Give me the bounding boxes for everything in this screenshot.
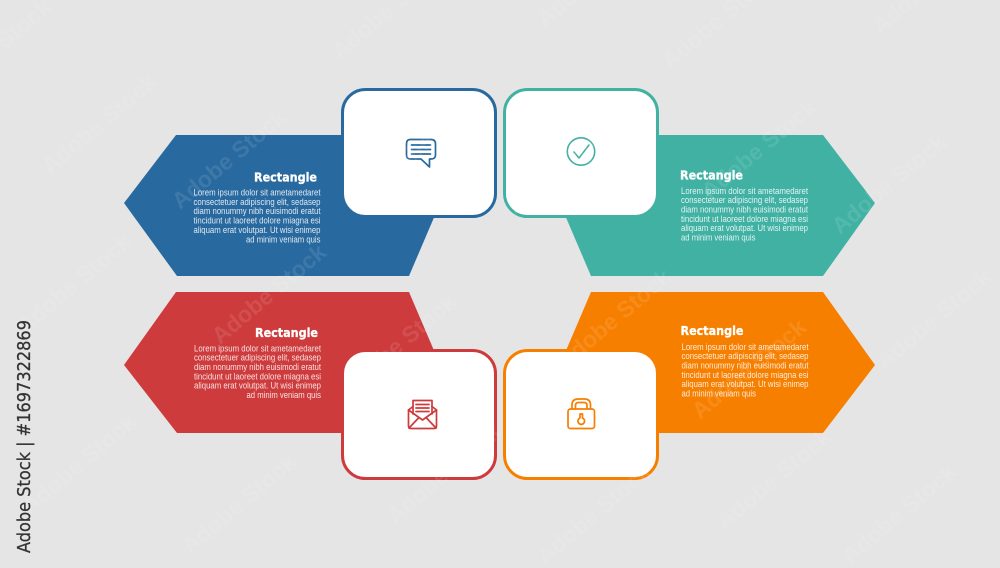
red body text: diam nonummy nibh euisimodi eratut <box>194 362 321 372</box>
orange heading: Rectangle <box>680 324 744 339</box>
watermarks: Adobe Stock <box>697 93 821 204</box>
watermarks: Adobe Stock <box>502 108 626 219</box>
red heading: Rectangle <box>255 326 318 341</box>
orange body text: ad minim veniam quis <box>682 389 757 399</box>
watermarks: Adobe Stock <box>367 83 491 194</box>
panel: blue arrow <box>124 135 450 276</box>
watermarks: Adobe Stock <box>827 128 951 239</box>
watermarks: Adobe Stock <box>337 288 461 399</box>
panel: teal arrow <box>550 135 875 276</box>
orange body text: Lorem ipsum dolor sit ametamedaret <box>682 342 809 352</box>
red body text <box>194 343 322 400</box>
watermarks: Adobe Stock <box>687 313 811 424</box>
teal body text: aliquam erat volutpat. Ut wisi enimep <box>681 223 808 233</box>
blue body text: Lorem ipsum dolor sit ametamedaret <box>194 188 321 198</box>
watermarks: Adobe Stock <box>712 423 836 534</box>
orange body text: diam nonummy nibh euisimodi eratut <box>682 360 809 370</box>
teal body text: tincidunt ut laoreet dolore miagna esi <box>681 214 808 224</box>
red body text: consectetuer adipiscing elit, sedasep <box>194 353 321 363</box>
red body text: tincidunt ut laoreet dolore miagna esi <box>194 371 321 381</box>
watermarks: Adobe Stock <box>552 263 676 374</box>
watermarks: Adobe Stock <box>177 448 301 559</box>
icon: padlock <box>568 399 594 428</box>
watermarks: Adobe Stock <box>837 458 961 568</box>
watermarks: Adobe Stock <box>207 238 331 349</box>
panel: orange arrow <box>550 292 875 433</box>
teal body text <box>681 186 808 243</box>
panel: red arrow <box>124 292 450 433</box>
watermarks: Adobe Stock <box>37 68 161 179</box>
card: red <box>342 350 496 478</box>
watermarks: Adobe Stock <box>532 458 656 568</box>
watermarks: Adobe Stock <box>382 418 506 529</box>
icon: check mark in circle <box>567 138 595 165</box>
card: orange <box>504 350 658 478</box>
orange body text <box>682 342 809 399</box>
blue body text: aliquam erat volutpat. Ut wisi enimep <box>194 225 321 235</box>
blue body text: ad minim veniam quis <box>246 234 321 244</box>
watermarks: Adobe Stock <box>12 228 136 339</box>
red body text: Lorem ipsum dolor sit ametamedaret <box>194 343 321 353</box>
orange body text: consectetuer adipiscing elit, sedasep <box>682 351 809 361</box>
teal body text: ad minim veniam quis <box>681 233 756 243</box>
red body text: aliquam erat volutpat. Ut wisi enimep <box>194 381 321 391</box>
card: blue <box>342 90 496 216</box>
blue heading: Rectangle <box>254 170 317 186</box>
blue body text <box>194 188 321 244</box>
red body text: ad minim veniam quis <box>246 390 322 400</box>
teal body text: diam nonummy nibh euisimodi eratut <box>681 204 808 214</box>
blue body text: consectetuer adipiscing elit, sedasep <box>194 197 321 207</box>
teal body text: consectetuer adipiscing elit, sedasep <box>681 195 808 205</box>
icon: open envelope <box>408 400 436 428</box>
teal body text: Lorem ipsum dolor sit ametamedaret <box>681 186 808 196</box>
watermarks: Adobe Stock <box>167 103 291 214</box>
orange body text: tincidunt ut laoreet dolore miagna esi <box>682 370 809 380</box>
side credit: Adobe Stock id: Adobe Stock | #1697322869 <box>14 320 35 553</box>
teal heading: Rectangle <box>680 168 743 184</box>
orange body text: aliquam erat volutpat. Ut wisi enimep <box>682 379 809 389</box>
blue body text: diam nonummy nibh euisimodi eratut <box>194 206 321 216</box>
blue body text: tincidunt ut laoreet dolore miagna esi <box>194 216 321 226</box>
icon: speech bubble <box>406 140 436 167</box>
card: teal <box>504 90 658 216</box>
watermarks: Adobe Stock <box>872 263 996 374</box>
watermarks: Adobe Stock <box>17 408 141 519</box>
